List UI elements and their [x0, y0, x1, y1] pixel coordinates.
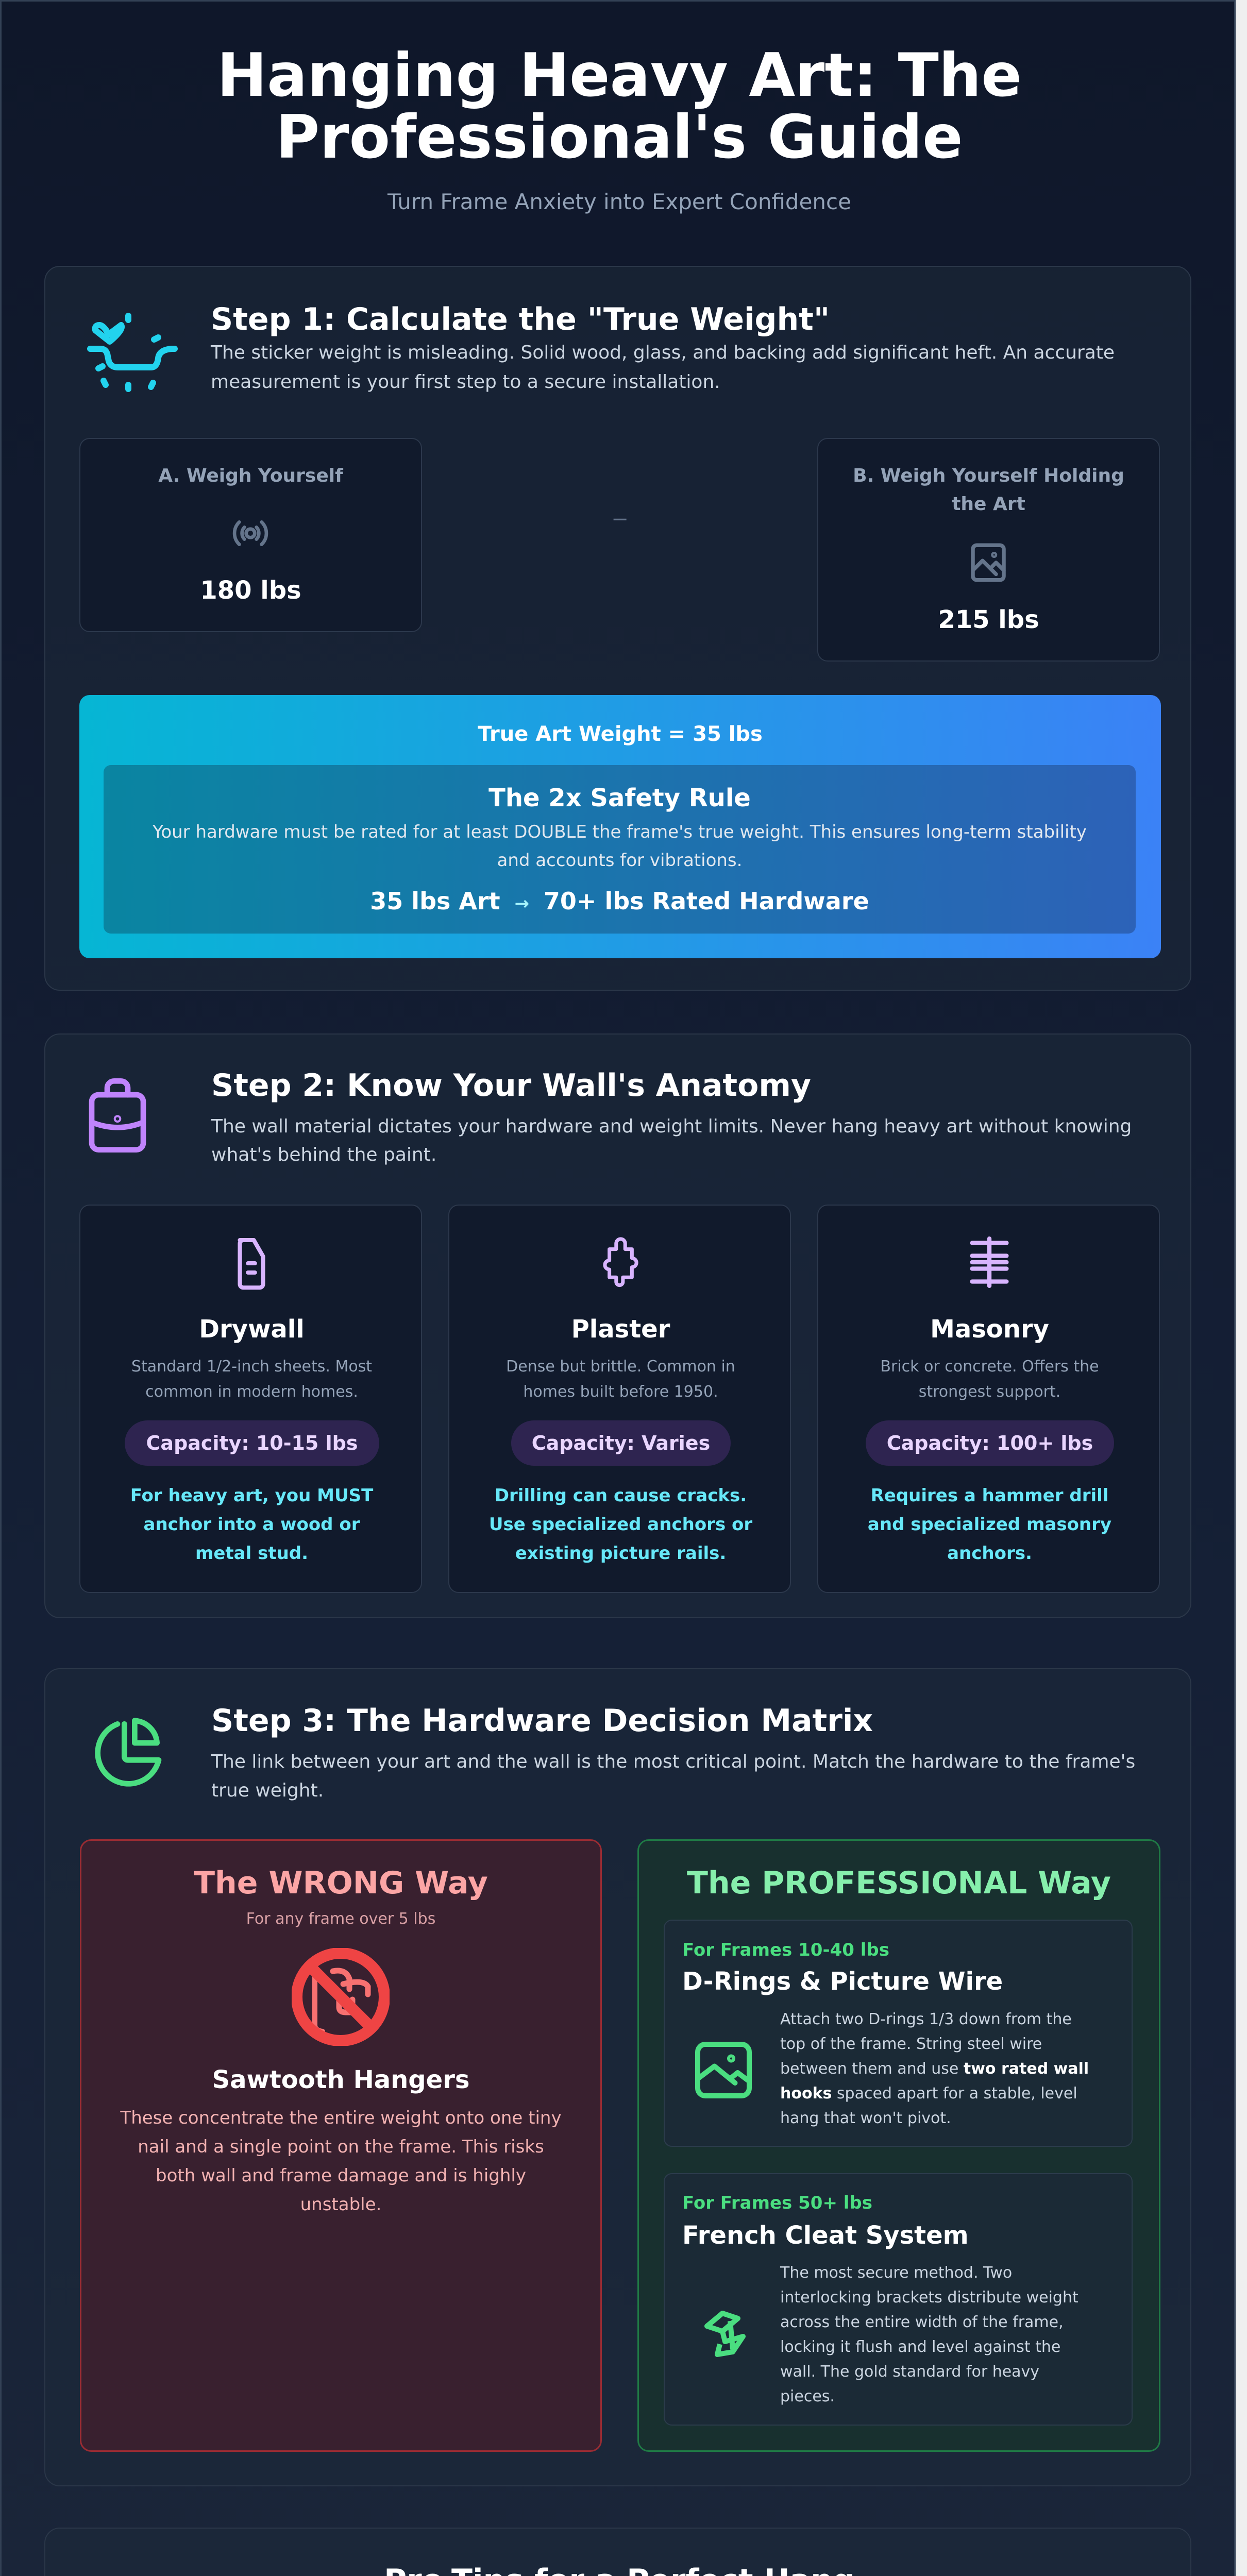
text: card A title: A. Weigh Yourself — [158, 465, 343, 486]
text: french cleat description: interlocking brackets distribute weight — [780, 2289, 1079, 2307]
capacity pill: Capacity: 10-15 lbs — [146, 1432, 358, 1454]
text: card B title — [853, 465, 1124, 515]
text: sawtooth description — [120, 2108, 562, 2215]
icon: cleat — [702, 2306, 753, 2362]
text: step 3 description — [211, 1751, 1135, 1801]
text: french cleat description — [780, 2261, 1079, 2409]
text: plaster description: Dense but brittle. Common in — [506, 1358, 735, 1376]
text: safety rule body: and accounts for vibrations. — [497, 850, 742, 871]
text: masonry description: strongest support. — [919, 1383, 1060, 1401]
text: drywall warning: metal stud. — [195, 1543, 308, 1564]
icon: briefcase — [89, 1078, 146, 1153]
text: drywall warning: For heavy art, you MUST — [130, 1485, 373, 1506]
text: masonry warning: Requires a hammer drill — [871, 1485, 1108, 1506]
heading: step 2: Step 2: Know Your Wall's Anatomy — [211, 1067, 811, 1104]
panel: step 1 — [44, 266, 1191, 991]
text: frames 50+: For Frames 50+ lbs — [682, 2193, 872, 2213]
text: drywall warning — [130, 1485, 373, 1564]
card: weigh yourself — [79, 438, 422, 632]
heading: french cleat: French Cleat System — [682, 2221, 969, 2250]
text: step 3 description: The link between your art and the wall is the most critical point. Match the hardware to the frame's — [211, 1751, 1135, 1772]
text: step 1 description — [210, 342, 1115, 393]
text: d-rings description: Attach two D-rings 1/3 down from the — [780, 2010, 1072, 2028]
text: plaster warning — [489, 1485, 752, 1564]
icon: broadcast — [233, 520, 268, 546]
text: step 2 description: The wall material dictates your hardware and weight limits. Never hang heavy art without knowing — [211, 1116, 1132, 1137]
text: plaster warning: Use specialized anchors or — [489, 1514, 752, 1535]
text: d-rings description: hang that won't pivot. — [780, 2109, 951, 2127]
text: plaster warning: existing picture rails. — [515, 1543, 726, 1564]
text: masonry warning: and specialized masonry — [868, 1514, 1111, 1535]
text: drywall description: Standard 1/2-inch sheets. Most — [131, 1358, 372, 1376]
title: Hanging Heavy Art: The — [217, 41, 1022, 110]
text: 215 lbs: 215 lbs — [938, 605, 1039, 634]
text: 180 lbs: 180 lbs — [200, 576, 301, 605]
panel: professional way — [637, 1839, 1160, 2452]
panel: drywall — [79, 1205, 422, 1593]
heading: sawtooth hangers: Sawtooth Hangers — [212, 2065, 469, 2094]
text: step 1 description: The sticker weight is misleading. Solid wood, glass, and backing add significant heft. An accurate — [211, 342, 1115, 363]
icon: scale with heart check — [87, 313, 178, 392]
text: french cleat description: across the entire width of the frame, — [780, 2313, 1064, 2331]
panel: wrong way — [80, 1839, 602, 2452]
text: french cleat description: The most secure method. Two — [780, 2264, 1012, 2282]
heading: step 1: Step 1: Calculate the "True Weight" — [211, 301, 830, 337]
panel: pro tips — [44, 2528, 1191, 2576]
text: drywall description: common in modern homes. — [145, 1383, 358, 1401]
heading: d-rings: D-Rings & Picture Wire — [682, 1967, 1003, 1996]
text: french cleat description: pieces. — [780, 2387, 835, 2405]
text: masonry warning — [868, 1485, 1111, 1564]
card: d-rings — [664, 1920, 1133, 2147]
text: step 2 description: what's behind the paint. — [211, 1144, 436, 1165]
text: step 3 description: true weight. — [211, 1780, 324, 1801]
text: formula: 35 lbs Art → 70+ lbs Rated Hardware — [370, 887, 869, 915]
icon: picture green — [695, 2042, 752, 2098]
text: drywall title: Drywall — [199, 1315, 305, 1344]
text: card B title: the Art — [952, 494, 1025, 515]
icon: file — [238, 1238, 265, 1290]
capacity pill — [125, 1420, 379, 1466]
icon: pie chart — [95, 1718, 162, 1787]
title — [217, 41, 1022, 172]
capacity pill — [511, 1420, 731, 1466]
panel: plaster — [448, 1205, 791, 1593]
text: safety rule body: Your hardware must be rated for at least DOUBLE the frame's true weight. This ensures long-term stability — [153, 822, 1087, 842]
icon: bricks — [970, 1236, 1009, 1288]
panel: 2x safety rule — [104, 765, 1136, 934]
icon: no sawtooth — [292, 1948, 390, 2046]
text: d-rings description: top of the frame. String steel wire — [780, 2035, 1042, 2053]
heading: safety rule: The 2x Safety Rule — [488, 784, 751, 812]
text: sawtooth description: nail and a single point on the frame. This risks — [138, 2137, 544, 2157]
text: plaster description — [506, 1358, 735, 1401]
text: drywall warning: anchor into a wood or — [143, 1514, 360, 1535]
text: safety rule body — [153, 822, 1087, 871]
icon: picture — [971, 543, 1006, 582]
text: masonry description — [880, 1358, 1099, 1401]
panel: step 3 — [44, 1668, 1191, 2486]
text: frames 10-40: For Frames 10-40 lbs — [682, 1940, 889, 1960]
text: plaster warning: Drilling can cause cracks. — [495, 1485, 747, 1506]
text: d-rings description — [780, 2010, 1089, 2127]
callout: true weight gradient box — [79, 695, 1161, 958]
subtitle: Turn Frame Anxiety into Expert Confidence — [387, 189, 851, 214]
title: Professional's Guide — [276, 103, 963, 172]
icon: puzzle — [603, 1237, 638, 1287]
text: step 2 description — [211, 1116, 1132, 1165]
text: drywall description — [131, 1358, 372, 1401]
text: french cleat description: wall. The gold standard for heavy — [780, 2363, 1039, 2381]
text: sawtooth description: These concentrate the entire weight onto one tiny — [120, 2108, 562, 2128]
heading: professional way: The PROFESSIONAL Way — [687, 1865, 1111, 1901]
capacity pill: Capacity: Varies — [532, 1432, 710, 1454]
text: sawtooth description: both wall and frame damage and is highly — [156, 2165, 526, 2186]
text: true art weight: True Art Weight = 35 lbs — [478, 722, 763, 746]
card: weigh holding art — [817, 438, 1160, 662]
heading: wrong way: The WRONG Way — [194, 1865, 488, 1901]
panel: masonry — [817, 1205, 1160, 1593]
text: masonry warning: anchors. — [947, 1543, 1032, 1564]
text: d-rings description: hooks spaced apart for a stable, level — [780, 2084, 1077, 2103]
capacity pill — [866, 1420, 1114, 1466]
text: french cleat description: locking it flush and level against the — [780, 2338, 1060, 2356]
text: sawtooth description: unstable. — [300, 2194, 381, 2215]
panel: step 2 — [44, 1033, 1191, 1618]
card: french cleat — [664, 2173, 1133, 2426]
text: step 1 description: measurement is your first step to a secure installation. — [211, 371, 720, 393]
capacity pill: Capacity: 100+ lbs — [887, 1432, 1093, 1454]
text: card B title: B. Weigh Yourself Holding — [853, 465, 1124, 486]
text: masonry title: Masonry — [930, 1315, 1049, 1344]
text: masonry description: Brick or concrete. Offers the — [880, 1358, 1099, 1376]
text: d-rings description: between them and use two rated wall — [780, 2060, 1089, 2078]
minus sign: − — [611, 507, 629, 531]
text: plaster title: Plaster — [571, 1315, 670, 1344]
text: plaster description: homes built before 1950. — [523, 1383, 718, 1401]
text: wrong subtitle: For any frame over 5 lbs — [246, 1910, 435, 1928]
heading: step 3: Step 3: The Hardware Decision Matrix — [211, 1703, 873, 1739]
